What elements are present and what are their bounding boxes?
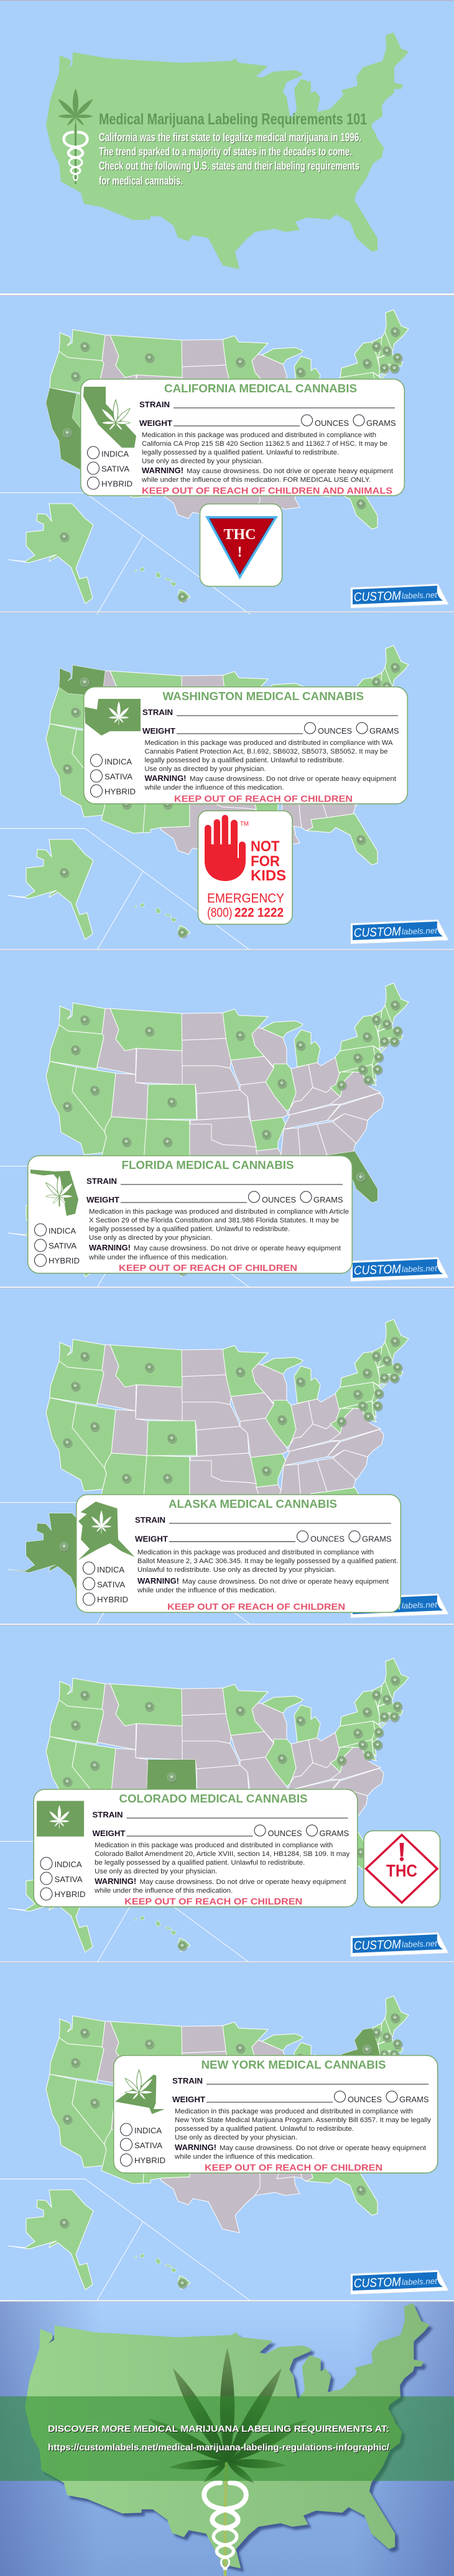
icon: not for kids hand (198, 811, 292, 924)
label: California: HYBRID (101, 479, 132, 489)
panel: Alaska (0, 1319, 448, 1624)
intro text (99, 131, 361, 187)
label: Florida: GRAMS (313, 1195, 343, 1204)
label: Washington: OUNCES (318, 726, 352, 736)
label: Washington: INDICA (104, 757, 132, 766)
icon: cannabis leaf and caduceus (57, 88, 95, 184)
label: Alaska: Medication in this package was produced and distributed in compliance with (137, 1549, 374, 1556)
icon: cannabis leaf (146, 2348, 310, 2486)
label: Florida: legally possessed by a qualified patient. Unlawful to redistribute. (89, 1226, 290, 1233)
intro text: The trend sparked to a majority of states in the decades to come. (99, 145, 352, 158)
label: Florida: KEEP OUT OF REACH OF CHILDREN (119, 1263, 297, 1273)
label: California: OUNCES (315, 418, 349, 428)
icon: THC triangle: THC (224, 527, 256, 543)
label: Washington: May cause drowsiness. Do not drive or operate heavy equipment (190, 775, 396, 783)
label: Washington: WASHINGTON MEDICAL CANNABIS (163, 690, 364, 703)
label: California: Medication in this package was produced and distributed in compliance with (142, 432, 376, 439)
panel: intro (46, 32, 409, 269)
label: California: May cause drowsiness. Do not drive or operate heavy equipment (187, 468, 393, 475)
highlighted state (8, 1513, 93, 1613)
label: California: while under the influence of this medication. FOR MEDICAL USE ONLY. (141, 476, 371, 484)
label: Florida: while under the influence of this medication. (88, 1253, 228, 1261)
logo: custom labels (351, 2270, 448, 2294)
state map (0, 645, 409, 950)
label: California: GRAMS (366, 418, 396, 428)
label: Florida: WARNING! (89, 1243, 131, 1252)
label: Alaska: STRAIN (135, 1515, 165, 1525)
state map (0, 1658, 409, 1963)
intro text: California was the first state to legalize medical marijuana in 1996. (99, 131, 361, 144)
label: New York: WEIGHT (172, 2095, 205, 2104)
icon: not for kids hand: TM (240, 821, 249, 828)
label: Washington: SATIVA (104, 772, 132, 781)
state map (0, 1319, 409, 1624)
label: Washington: STRAIN (142, 708, 173, 717)
icon: not for kids hand: EMERGENCY (207, 892, 284, 905)
label: Washington: legally possessed by a qualified patient. Unlawful to redistribute. (144, 757, 345, 764)
label: Alaska: Unlawful to redistribute. Use only as directed by your physician. (137, 1566, 336, 1574)
label: Colorado: SATIVA (55, 1875, 83, 1884)
label: Alaska: HYBRID (97, 1595, 128, 1604)
label: Colorado: Use only as directed by your physician. (95, 1868, 217, 1875)
highlighted state (147, 1760, 197, 1794)
label: New York: INDICA (134, 2126, 162, 2135)
label: Florida: X Section 29 of the Florida Constitution and 381.986 Florida Statutes. It may be (89, 1217, 339, 1224)
label: Alaska (76, 1495, 401, 1612)
label: California: SATIVA (101, 464, 129, 474)
icon: not for kids hand: (800) (207, 905, 233, 920)
label: Alaska: ALASKA MEDICAL CANNABIS (169, 1498, 337, 1510)
panel: Florida (0, 983, 448, 1288)
label: New York: KEEP OUT OF REACH OF CHILDREN (205, 2163, 382, 2173)
label: Colorado: KEEP OUT OF REACH OF CHILDREN (124, 1896, 302, 1907)
label: Alaska: while under the influence of this medication. (137, 1587, 276, 1594)
label: Colorado: while under the influence of this medication. (94, 1887, 233, 1895)
label: Colorado: WARNING! (95, 1877, 136, 1886)
label: Florida: FLORIDA MEDICAL CANNABIS (122, 1159, 294, 1171)
state map (0, 983, 409, 1288)
icon: THC triangle: ! (238, 545, 243, 561)
state map (0, 310, 409, 614)
label: Florida: INDICA (49, 1226, 76, 1235)
map silhouette (25, 2303, 430, 2569)
icon: THC diamond: THC (386, 1861, 417, 1880)
label: Alaska: INDICA (97, 1565, 124, 1574)
label: Washington: Medication in this package was produced and distributed in compliance with WA (144, 739, 393, 747)
label: New York (114, 2056, 438, 2173)
label: Colorado: INDICA (55, 1860, 82, 1869)
highlighted state (59, 665, 105, 696)
label: Florida: STRAIN (86, 1176, 117, 1186)
stem (225, 2462, 226, 2576)
label: Alaska: OUNCES (310, 1535, 345, 1543)
label: Colorado: WEIGHT (92, 1829, 126, 1838)
label: New York: New York State Medical Marijuana Program. Assembly Bill 6357. It may be legally (175, 2117, 432, 2124)
panel: Washington (0, 645, 448, 950)
label: Colorado: COLORADO MEDICAL CANNABIS (119, 1793, 307, 1805)
map shadow (28, 2306, 433, 2572)
label: California: KEEP OUT OF REACH OF CHILDREN AND ANIMALS (142, 486, 392, 496)
footer text: https://customlabels.net/medical-marijuana-labeling-regulations-infographic/ (48, 2443, 389, 2453)
label: California: WEIGHT (139, 418, 172, 428)
highlighted state (340, 2028, 379, 2064)
label: California: STRAIN (139, 400, 170, 409)
map silhouette (46, 32, 409, 269)
label: Alaska: KEEP OUT OF REACH OF CHILDREN (167, 1602, 345, 1612)
label: New York: HYBRID (134, 2156, 165, 2165)
icon: caduceus (204, 2483, 246, 2569)
label: Florida: HYBRID (49, 1256, 80, 1265)
icon: THC diamond (364, 1830, 440, 1907)
label: Colorado: STRAIN (92, 1810, 123, 1819)
label: Alaska: Ballot Measure 2, 3 AAC 306.345. It may be legally possessed by a qualified patient. (137, 1558, 398, 1565)
label: California (81, 379, 404, 496)
label: New York: possessed by a qualified patient. Unlawful to redistribute. (175, 2125, 354, 2133)
footer text (48, 2424, 389, 2453)
label: Colorado: OUNCES (267, 1829, 302, 1838)
label: New York: SATIVA (134, 2141, 162, 2150)
label: Florida: Use only as directed by your physician. (89, 1234, 212, 1242)
icon: not for kids hand: FOR (251, 853, 280, 870)
panel: New York (0, 1996, 448, 2301)
label: Alaska: SATIVA (97, 1580, 125, 1589)
label: California: California CA Prop 215 SB 420 Section 11362.5 and 11362.7 of HSC. It may be (142, 440, 387, 448)
label: New York: Medication in this package was produced and distributed in compliance with (175, 2108, 413, 2115)
icon: THC triangle (200, 504, 282, 586)
label: New York: NEW YORK MEDICAL CANNABIS (202, 2059, 386, 2071)
label: California: legally possessed by a qualified patient. Unlawful to redistribute. (142, 449, 339, 456)
label: California: CALIFORNIA MEDICAL CANNABIS (164, 382, 357, 395)
panel: California (0, 310, 448, 614)
label: Florida: May cause drowsiness. Do not drive or operate heavy equipment (134, 1245, 341, 1252)
label: Washington: Use only as directed by your physician. (144, 765, 266, 773)
logo: custom labels (351, 584, 448, 608)
icon: not for kids hand: KIDS (251, 867, 286, 884)
label: Colorado: GRAMS (320, 1829, 349, 1838)
label: Florida: Medication in this package was produced and distributed in compliance with Article (89, 1208, 349, 1216)
label: Washington: Cannabis Patient Protection Act, B.I.692, SB6032, SB5073, SB5052. It may be (144, 748, 387, 755)
label: Washington: WARNING! (144, 773, 187, 783)
label: Florida: SATIVA (49, 1241, 76, 1250)
label: California: Use only as directed by your physician. (142, 458, 263, 465)
logo: custom labels (351, 1257, 448, 1281)
state map (0, 1996, 409, 2301)
label: New York: May cause drowsiness. Do not drive or operate heavy equipment (220, 2144, 426, 2152)
label: Colorado: Medication in this package was produced and distributed in compliance with (95, 1842, 333, 1849)
label: Alaska: GRAMS (362, 1535, 392, 1543)
label: Colorado: be legally possessed by a qualified patient. Unlawful to redistribute. (95, 1859, 305, 1867)
label: Alaska: WARNING! (137, 1576, 179, 1586)
label: New York: OUNCES (348, 2095, 382, 2104)
banner (0, 2396, 454, 2481)
label: Washington: while under the influence of this medication. (144, 784, 284, 792)
label: Washington: GRAMS (369, 726, 399, 736)
logo: custom labels (351, 920, 448, 944)
heading: Medical Marijuana Labeling Requirements 101 (99, 111, 367, 128)
label: Washington: KEEP OUT OF REACH OF CHILDREN (174, 793, 353, 805)
intro text: for medical cannabis. (99, 175, 183, 187)
label: Florida (28, 1156, 352, 1273)
label: Florida: OUNCES (262, 1195, 296, 1204)
label: New York: GRAMS (399, 2095, 429, 2104)
label: California: WARNING! (142, 466, 183, 475)
label: New York: WARNING! (175, 2143, 216, 2152)
label: Washington: HYBRID (104, 787, 136, 796)
label: Florida: WEIGHT (86, 1195, 119, 1204)
footer text: DISCOVER MORE MEDICAL MARIJUANA LABELING REQUIREMENTS AT: (48, 2424, 389, 2434)
label: California: INDICA (101, 449, 129, 459)
label: Alaska: WEIGHT (135, 1535, 168, 1543)
label: Washington: WEIGHT (142, 726, 175, 736)
label: Alaska: May cause drowsiness. Do not drive or operate heavy equipment (182, 1578, 389, 1586)
label: Colorado: Colorado Ballot Amendment 20, Article XVIII, section 14, HB1284, SB 109. It may (95, 1850, 350, 1858)
panel: footer (0, 2302, 454, 2576)
label: New York: while under the influence of this medication. (174, 2153, 314, 2161)
label: Colorado: HYBRID (55, 1890, 86, 1899)
icon: not for kids hand: NOT (251, 838, 280, 855)
logo: custom labels (351, 1932, 448, 1957)
intro text: Check out the following U.S. states and their labeling requirements (99, 160, 359, 172)
highlighted state (306, 1151, 378, 1203)
label: Washington (84, 687, 407, 805)
label: Colorado (34, 1789, 358, 1907)
label: New York: Use only as directed by your physician. (175, 2134, 297, 2141)
label: New York: STRAIN (172, 2076, 203, 2085)
highlighted state (46, 388, 106, 481)
panel: Colorado (0, 1658, 448, 1963)
label: Colorado: May cause drowsiness. Do not drive or operate heavy equipment (139, 1878, 346, 1886)
logo: custom labels (351, 1594, 448, 1618)
icon: not for kids hand: 222 1222 (234, 905, 284, 920)
